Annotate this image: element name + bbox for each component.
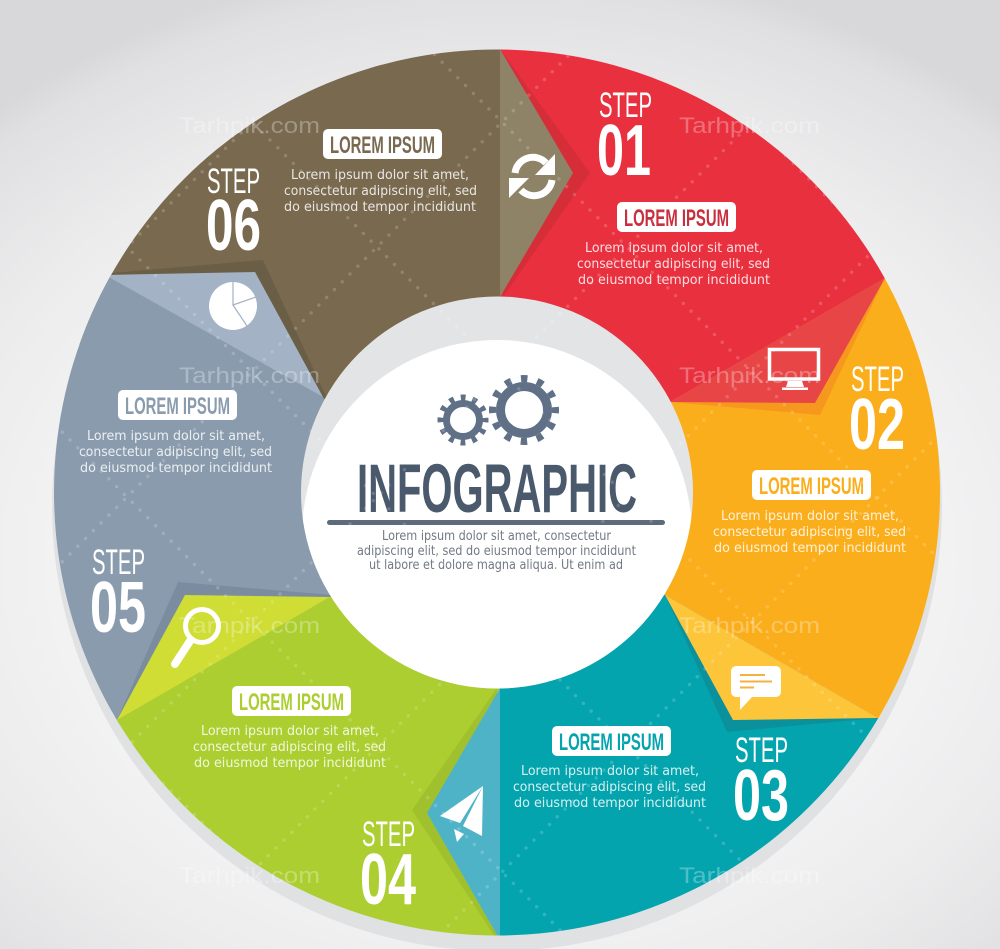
lime light fold xyxy=(117,595,330,720)
hub ring xyxy=(301,296,693,688)
lime fold shadow xyxy=(412,688,497,940)
heading pill 05: LOREM IPSUM xyxy=(125,393,230,420)
step 05 label: 05 xyxy=(90,568,146,648)
heading pill 01 xyxy=(617,202,736,232)
teal light fold with plane xyxy=(427,688,500,940)
icon: large gear xyxy=(492,378,556,442)
heading pill 04: LOREM IPSUM xyxy=(239,689,344,716)
icon: paper plane xyxy=(440,786,483,842)
lime segment xyxy=(90,597,500,940)
red light fold xyxy=(670,278,885,403)
step 04 label: STEP xyxy=(362,815,415,854)
step 04 label xyxy=(362,821,416,904)
heading pill 05 xyxy=(118,390,237,420)
heading pill 04 xyxy=(232,686,351,716)
heading pill 01: LOREM IPSUM xyxy=(624,205,729,232)
title rule xyxy=(327,520,665,525)
body text 06: Lorem ipsum dolor sit amet, xyxy=(291,168,469,183)
orange fold shadow xyxy=(670,278,885,415)
icon: monitor xyxy=(770,350,818,390)
hub description: adipiscing elit, sed do eiusmod tempor incididunt xyxy=(357,544,636,559)
panel: step 01 xyxy=(500,50,885,403)
title: INFOGRAPHIC xyxy=(357,450,637,527)
step 01 label: 01 xyxy=(597,111,651,191)
body text 04: consectetur adipiscing elit, sed xyxy=(193,740,386,755)
watermarks: Tarhpik.com xyxy=(179,863,320,888)
body text 03: consectetur adipiscing elit, sed xyxy=(513,780,706,795)
body text 05: Lorem ipsum dolor sit amet, xyxy=(87,429,265,444)
panel: centre hub xyxy=(301,296,693,730)
heading pill 06: LOREM IPSUM xyxy=(330,132,435,159)
hub description: Lorem ipsum dolor sit amet, consectetur xyxy=(382,529,612,544)
step 04 label: 04 xyxy=(360,840,416,920)
panel: step 02 xyxy=(664,273,940,720)
step 06 label xyxy=(208,168,260,250)
step 06 label: 06 xyxy=(206,186,261,266)
yellow light fold xyxy=(665,595,878,720)
step 06 label: STEP xyxy=(207,162,260,201)
body text 03: do eiusmod tempor incididunt xyxy=(514,796,706,811)
body text 03 xyxy=(513,764,706,811)
watermarks: Tarhpik.com xyxy=(179,363,320,388)
red fold shadow xyxy=(500,49,590,297)
red segment xyxy=(500,50,885,402)
body text 01: Lorem ipsum dolor sit amet, xyxy=(585,241,763,256)
icon: refresh arrows xyxy=(509,154,555,198)
brown segment xyxy=(80,50,500,397)
step 03 label xyxy=(735,737,788,821)
body text 02: do eiusmod tempor incididunt xyxy=(714,541,906,556)
blue fold shadow xyxy=(117,582,332,720)
icon: magnifier xyxy=(175,610,218,664)
icon: small gear xyxy=(440,398,486,442)
watermarks xyxy=(179,113,820,888)
step 02 label xyxy=(851,366,903,450)
step 03 label: STEP xyxy=(735,731,788,770)
panel: step 04 xyxy=(90,595,500,940)
step 02 label: STEP xyxy=(851,360,904,399)
body text 02: Lorem ipsum dolor sit amet, xyxy=(721,509,899,524)
body text 01: consectetur adipiscing elit, sed xyxy=(577,257,770,272)
heading pill 02 xyxy=(752,470,871,500)
step 03 label: 03 xyxy=(733,756,789,836)
step 02 label: 02 xyxy=(849,385,905,465)
blue light fold xyxy=(105,272,323,397)
body text 04: Lorem ipsum dolor sit amet, xyxy=(201,724,379,739)
hub white face xyxy=(302,340,692,730)
step 05 label xyxy=(92,549,145,632)
watermarks: Tarhpik.com xyxy=(679,113,820,138)
hub description: ut labore et dolore magna aliqua. Ut enim ad xyxy=(369,558,623,573)
body text 03: Lorem ipsum dolor sit amet, xyxy=(521,764,699,779)
body text 05: do eiusmod tempor incididunt xyxy=(80,461,272,476)
body text 06: do eiusmod tempor incididunt xyxy=(284,200,476,215)
body text 01 xyxy=(577,241,770,288)
step 01 label xyxy=(597,86,652,191)
orange segment xyxy=(664,273,940,718)
watermarks: Tarhpik.com xyxy=(679,363,820,388)
teal segment xyxy=(500,594,878,936)
panel: step 03 xyxy=(427,594,878,936)
icon: speech bubble xyxy=(731,666,781,710)
blue segment xyxy=(54,276,330,725)
heading pill 02: LOREM IPSUM xyxy=(759,473,864,500)
taupe tab with refresh icon xyxy=(500,49,573,297)
body text 06: consectetur adipiscing elit, sed xyxy=(284,184,477,199)
icon: pie chart xyxy=(209,282,257,330)
watermarks: Tarhpik.com xyxy=(679,863,820,888)
panel: step 05 xyxy=(54,272,331,725)
teal fold shadow xyxy=(665,595,878,732)
body text 05: consectetur adipiscing elit, sed xyxy=(79,445,272,460)
heading pill 06 xyxy=(323,129,442,159)
watermarks: Tarhpik.com xyxy=(179,613,320,638)
watermarks: Tarhpik.com xyxy=(179,113,320,138)
body text 02: consectetur adipiscing elit, sed xyxy=(713,525,906,540)
body text 04: do eiusmod tempor incididunt xyxy=(194,756,386,771)
body text 02 xyxy=(713,509,906,556)
heading pill 03: LOREM IPSUM xyxy=(559,729,664,756)
body text 05 xyxy=(79,429,272,476)
body text 01: do eiusmod tempor incididunt xyxy=(578,273,770,288)
step 01 label: STEP xyxy=(599,86,652,125)
body text 04 xyxy=(193,724,386,771)
hub description xyxy=(357,529,636,573)
brown fold shadow xyxy=(100,260,330,405)
body text 06 xyxy=(284,168,477,215)
panel: step 06 xyxy=(80,50,500,400)
heading pill 03 xyxy=(552,726,671,756)
watermarks: Tarhpik.com xyxy=(679,613,820,638)
step 05 label: STEP xyxy=(92,543,145,582)
